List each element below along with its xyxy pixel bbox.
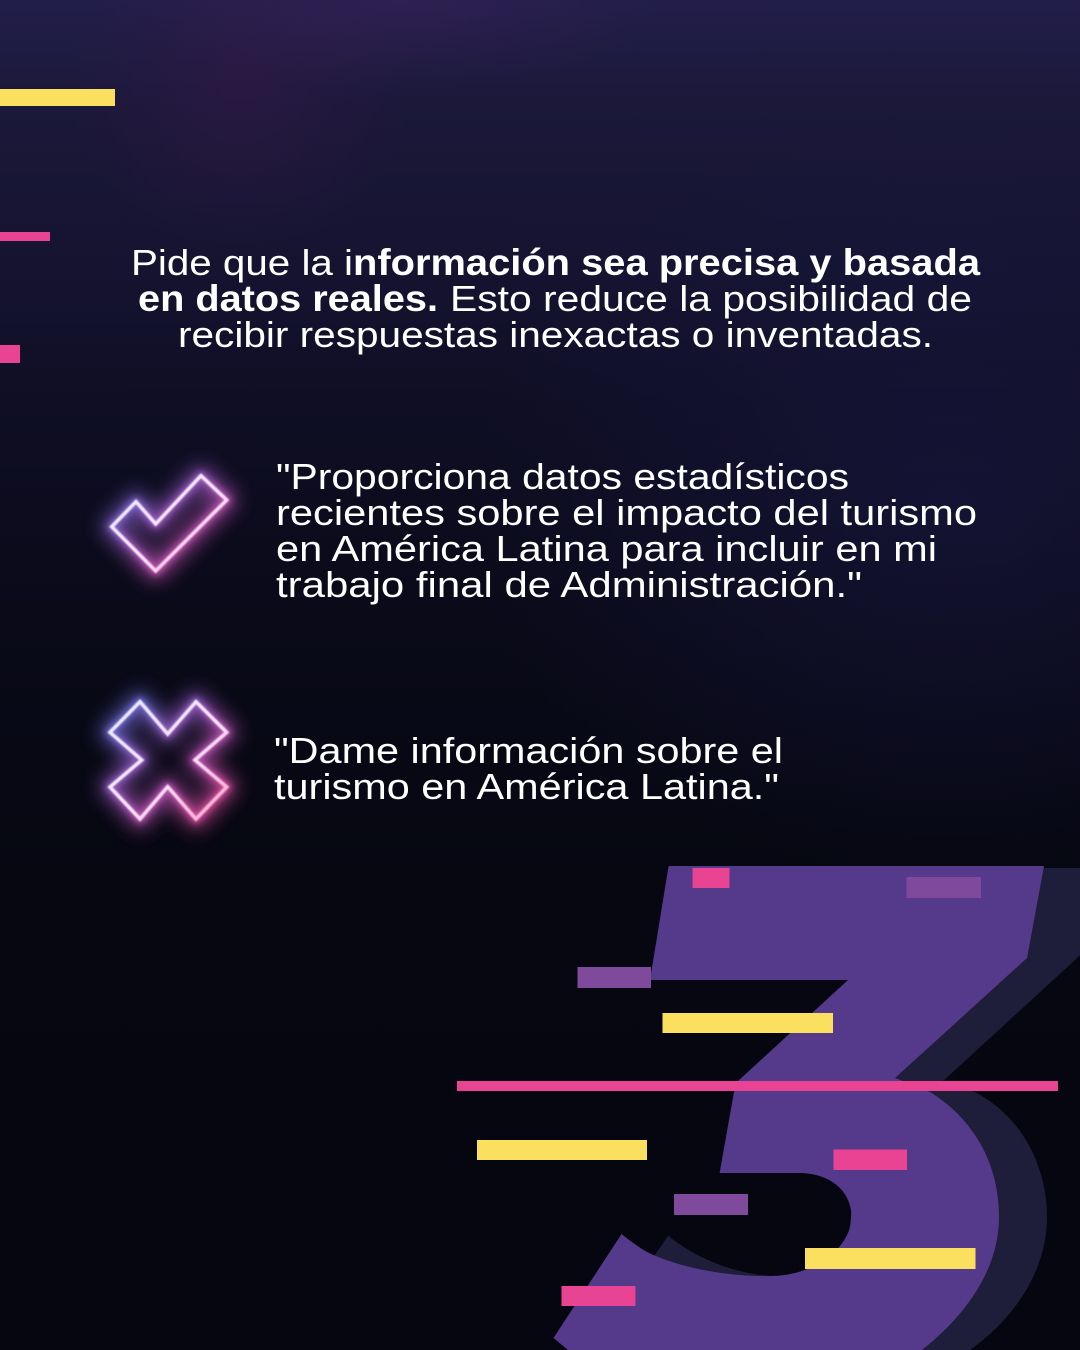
stripe: yellow left	[477, 1140, 647, 1160]
stripe: purple top right	[906, 877, 981, 898]
good example text: "Proporciona datos estadísticos	[276, 456, 849, 497]
intro paragraph: Pide que la i	[131, 242, 353, 283]
intro paragraph: en datos reales.	[138, 278, 438, 319]
stripe: purple left	[578, 967, 651, 988]
stripe: pink right	[834, 1150, 907, 1170]
intro paragraph: nformación sea precisa y basada	[353, 242, 980, 283]
icon: neon X mark	[110, 702, 227, 819]
bad example text: "Dame información sobre el	[274, 730, 783, 771]
number 3: inner shadow	[656, 1236, 771, 1276]
number 3: shadow	[650, 868, 1080, 1350]
good example text: en América Latina para incluir en mi	[276, 528, 937, 569]
decorative stripes: left edge	[0, 89, 115, 363]
stripe: purple middle	[674, 1194, 748, 1215]
number 3: front face	[554, 866, 1044, 1350]
stripe: yellow upper	[662, 1013, 833, 1033]
intro paragraph: recibir respuestas inexactas o inventadas.	[178, 314, 933, 355]
intro paragraph: Esto reduce la posibilidad de	[450, 278, 972, 319]
good example text	[276, 456, 977, 605]
large number 3 with stripes	[457, 866, 1080, 1350]
stripe: pink small top	[692, 868, 730, 888]
icon: neon check mark	[112, 476, 227, 571]
stripe: long pink line	[457, 1081, 1058, 1091]
bad example text: turismo en América Latina."	[274, 766, 779, 807]
bad example text	[274, 730, 783, 807]
stripe: yellow lower	[805, 1248, 976, 1269]
stripe: pink bottom	[562, 1286, 636, 1306]
good example text: trabajo final de Administración."	[276, 564, 862, 605]
intro paragraph	[131, 242, 980, 355]
good example text: recientes sobre el impacto del turismo	[276, 492, 977, 533]
